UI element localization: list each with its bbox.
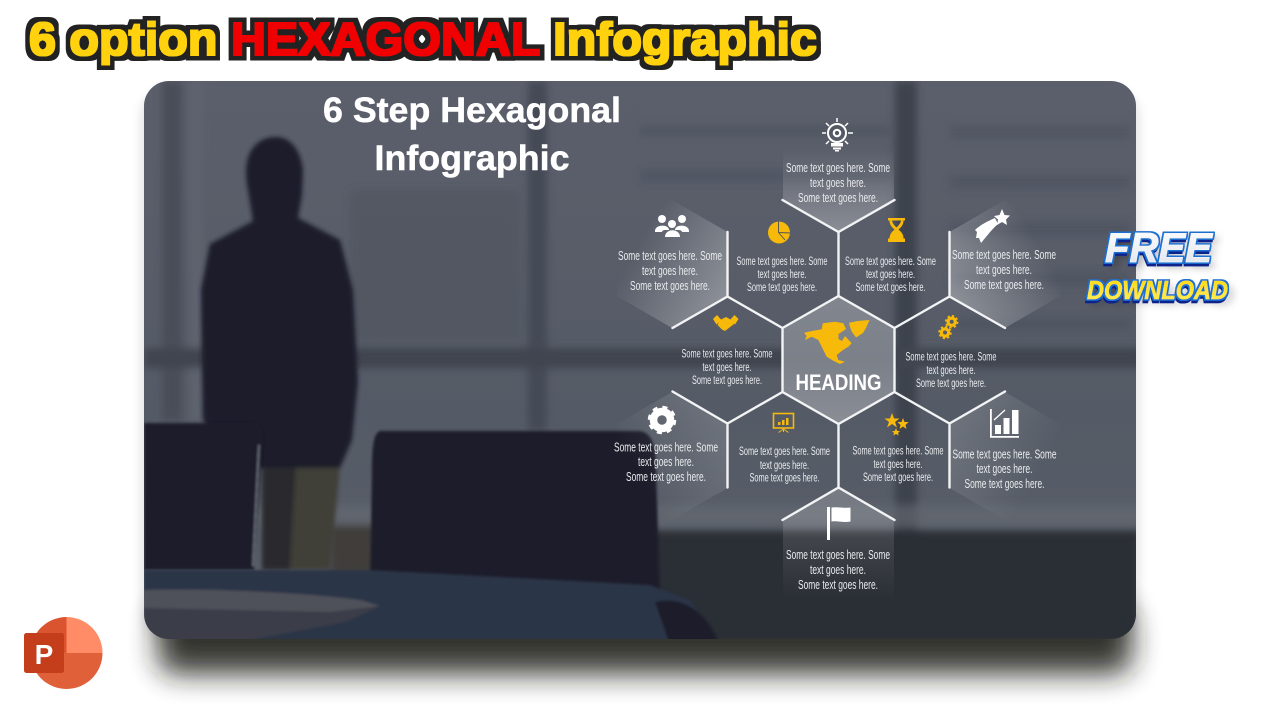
text: upper left [618, 249, 722, 293]
text: pie block: Some text goes here. Some [736, 256, 828, 268]
hexagon grid lines [672, 200, 1005, 520]
icon: growth chart [990, 409, 1019, 438]
text: stars block: text goes here. [874, 459, 922, 471]
text: left block: Some text goes here. Some [682, 348, 772, 360]
text: right block: Some text goes here. [916, 378, 986, 390]
top banner title: 6 option HEXAGONAL Infographic [29, 13, 817, 65]
icon: settings gear [650, 408, 674, 432]
hex fill: top [783, 162, 894, 230]
title: slide heading [323, 91, 621, 178]
text: left block [682, 348, 772, 387]
icon: pie chart [768, 222, 790, 244]
text: top: text goes here. [810, 176, 866, 190]
text: stars block [852, 446, 944, 484]
icon: people [655, 215, 689, 237]
text: bottom: Some text goes here. [798, 578, 878, 592]
text: top: Some text goes here. [798, 191, 878, 205]
text: lower left: text goes here. [638, 455, 694, 469]
person silhouette [201, 137, 358, 570]
hex fill: lower right [950, 392, 1036, 504]
text: bottom [786, 548, 890, 592]
text: hourglass block [845, 256, 936, 294]
translucent outer hexagons [626, 162, 1052, 578]
text: stars block: Some text goes here. [863, 472, 933, 484]
text: lower right [952, 448, 1057, 491]
text: upper right: Some text goes here. [964, 278, 1044, 292]
text: upper left: Some text goes here. [630, 279, 710, 293]
text: top: Some text goes here. Some [786, 161, 890, 175]
text: lower left [614, 440, 718, 484]
text: stars block: Some text goes here. Some [852, 446, 944, 458]
text: left block: text goes here. [702, 362, 752, 374]
panel drop shadow [142, 90, 1138, 674]
hex fill: bottom [783, 489, 894, 578]
hex fill: upper right [950, 205, 1052, 328]
table and laptop [144, 570, 720, 645]
text: presentation block: Some text goes here. [750, 472, 820, 484]
badge: free download [1087, 224, 1228, 305]
badge: free download: DOWNLOAD [1087, 275, 1228, 305]
center hexagon [783, 296, 894, 424]
icon: handshake [713, 315, 738, 331]
icon: presentation board [774, 414, 794, 432]
text: lower right: Some text goes here. Some [952, 448, 1057, 462]
text: upper left: text goes here. [642, 264, 698, 278]
icon: North America map [804, 320, 870, 364]
chairs [144, 423, 660, 600]
icon: PowerPoint logo [24, 617, 102, 689]
text: right block: Some text goes here. Some [906, 352, 996, 364]
icon: light bulb [822, 118, 853, 152]
text: bottom: Some text goes here. Some [786, 548, 890, 562]
text: upper right: text goes here. [976, 263, 1032, 277]
icon: flag [827, 507, 850, 540]
badge: free download: FREE [1105, 224, 1214, 271]
text: presentation block [739, 446, 830, 484]
text: hourglass block: Some text goes here. Some [845, 256, 936, 268]
icon: hourglass [888, 218, 905, 242]
text: upper right [952, 248, 1056, 292]
icon: gears [939, 316, 958, 338]
text: lower left: Some text goes here. Some [614, 440, 718, 454]
text: left block: Some text goes here. [692, 375, 762, 387]
icon: three stars [884, 413, 908, 436]
text: hourglass block: Some text goes here. [856, 282, 926, 294]
text: top [786, 161, 890, 205]
text: pie block: text goes here. [758, 269, 806, 281]
text: lower right: text goes here. [976, 462, 1032, 476]
text: upper left: Some text goes here. Some [618, 249, 722, 263]
hex fill: lower left [641, 392, 726, 504]
heading text: HEADING [796, 370, 882, 395]
text: right block: text goes here. [926, 365, 976, 377]
text: hourglass block: text goes here. [866, 269, 915, 281]
icon: PowerPoint logo: P [35, 639, 53, 670]
text: lower left: Some text goes here. [626, 470, 706, 484]
icon: shooting star [975, 209, 1010, 243]
text: upper right: Some text goes here. Some [952, 248, 1056, 262]
title: slide heading: 6 Step Hexagonal [323, 91, 621, 130]
title: slide heading: Infographic [374, 139, 570, 178]
text: pie block [736, 256, 828, 294]
text: presentation block: Some text goes here. Some [739, 446, 830, 458]
panel: blurred office photo background [144, 81, 1144, 645]
text: presentation block: text goes here. [760, 460, 809, 472]
text: pie block: Some text goes here. [747, 282, 817, 294]
text: bottom: text goes here. [810, 563, 866, 577]
text: right block [906, 352, 996, 390]
hex fill: upper left [626, 204, 726, 328]
text: lower right: Some text goes here. [964, 477, 1044, 491]
